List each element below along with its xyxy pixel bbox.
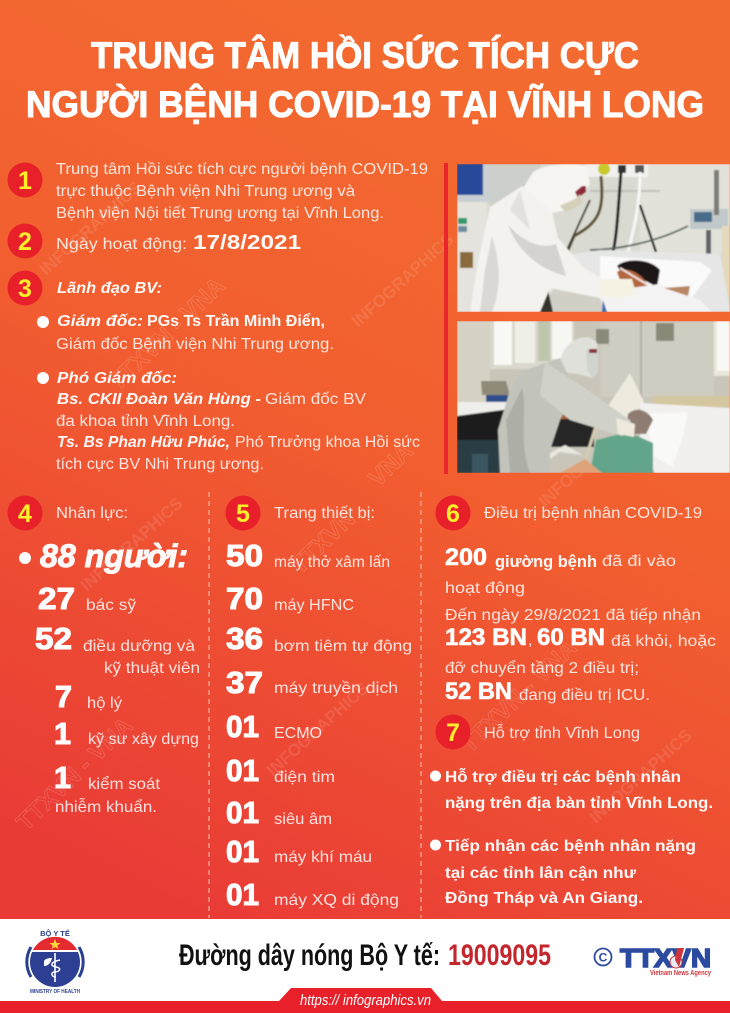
panel: section 2 start date	[8, 224, 301, 258]
panel: section 4 staffing	[8, 496, 200, 816]
panel: section 5 equipment: 70	[226, 581, 263, 616]
panel: section 5 equipment: máy thở xâm lấn	[274, 554, 390, 571]
panel: section 4 staffing: kiểm soát	[88, 775, 161, 793]
panel: section 5 equipment: 37	[226, 665, 263, 700]
text: INFOGRAPHICS	[535, 410, 645, 511]
panel: section 3 hospital leadership: Giám đốc Bệnh viện Nhi Trung ương.	[56, 336, 334, 353]
icon: Ministry of Health logo: BỘ Y TẾ	[40, 928, 70, 938]
panel: section 4 staffing: điều dưỡng và	[83, 638, 195, 655]
photo: doctor in protective suit caring for elderly patient	[457, 321, 730, 473]
panel: section 6 COVID-19 treatment: giường bệnh	[495, 552, 597, 571]
panel: section 4 staffing: nhiễm khuẩn.	[55, 797, 157, 816]
panel: section 2 start date: 17/8/2021	[193, 232, 301, 254]
panel: section 5 equipment: 01	[226, 753, 259, 788]
panel: section 5 equipment: 01	[226, 795, 259, 830]
text: TTXVN	[285, 505, 361, 579]
panel: section 6 COVID-19 treatment: 6	[446, 500, 460, 528]
panel: section 5 equipment: bơm tiêm tự động	[274, 638, 412, 655]
panel: section 5 equipment: 01	[226, 709, 259, 744]
panel: section 4 staffing: 1	[54, 760, 71, 795]
text: INFOGRAPHICS	[348, 230, 458, 331]
panel: section 5 equipment: 01	[226, 834, 259, 869]
panel: section 3 hospital leadership: đa khoa tỉnh Vĩnh Long.	[56, 413, 235, 430]
panel: section 4 staffing: 7	[55, 679, 72, 714]
panel: section 6 COVID-19 treatment: Điều trị bệnh nhân COVID-19	[484, 505, 702, 522]
panel: section 3 hospital leadership: Bs. CKII Đoàn Văn Hùng -	[57, 391, 261, 408]
hotline: 19009095	[448, 939, 551, 972]
panel: section 3 hospital leadership: Giám đốc BV	[265, 391, 366, 408]
panel: section 1 introduction: trực thuộc Bệnh viện Nhi Trung ương và	[56, 183, 355, 200]
footer band	[0, 919, 730, 1001]
website ribbon	[0, 988, 730, 1013]
panel: section 6 COVID-19 treatment: đỡ chuyển tầng 2 điều trị;	[445, 659, 639, 677]
panel: section 6 COVID-19 treatment: hoạt động	[445, 580, 525, 597]
panel: section 3 hospital leadership	[8, 270, 420, 473]
panel: section 6 COVID-19 treatment: đã khỏi, hoặc	[611, 633, 716, 650]
panel: section 5 equipment: máy khí máu	[274, 849, 372, 866]
panel: section 6 COVID-19 treatment: 52 BN	[445, 678, 512, 705]
panel: section 4 staffing: 4	[18, 500, 32, 528]
text: VNA	[363, 438, 419, 492]
panel: section 4 staffing: 1	[54, 716, 71, 751]
text: TTXVN - VNA	[11, 712, 139, 836]
panel: section 5 equipment: điện tim	[274, 769, 335, 786]
title: TRUNG TÂM HỒI SỨC TÍCH CỰC	[91, 34, 639, 76]
panel: section 3 hospital leadership: Phó Giám đốc:	[57, 370, 177, 387]
panel: section 6 COVID-19 treatment	[436, 496, 716, 705]
panel: section 5 equipment: 36	[226, 621, 263, 656]
panel: section 4 staffing: hộ lý	[87, 695, 122, 712]
panel: section 7 support for Vinh Long: nặng trên địa bàn tỉnh Vĩnh Long.	[445, 795, 713, 812]
panel: section 7 support for Vinh Long: Đồng Tháp và An Giang.	[445, 890, 643, 907]
panel: section 5 equipment: Trang thiết bị:	[274, 505, 375, 522]
panel: section 3 hospital leadership: Lãnh đạo BV:	[57, 280, 162, 297]
panel: section 3 hospital leadership: PGs Ts Trần Minh Điển,	[147, 312, 325, 330]
panel: section 5 equipment: 50	[226, 538, 263, 573]
panel: section 4 staffing: 27	[38, 581, 75, 616]
panel: section 1 introduction: Bệnh viện Nội tiết Trung ương tại Vĩnh Long.	[56, 205, 384, 222]
text: TTXVN - VNA	[103, 272, 231, 396]
text: INFOGRAPHICS	[36, 178, 146, 279]
icon: Ministry of Health logo: MINISTRY OF HEALTH	[30, 989, 80, 995]
panel: section 3 hospital leadership: 3	[18, 275, 32, 303]
panel: section 3 hospital leadership: Giám đốc:	[57, 313, 143, 330]
panel: section 2 start date: Ngày hoạt động:	[56, 236, 187, 253]
panel: section 5 equipment: máy truyền dịch	[274, 680, 398, 697]
photo: doctor in protective suit treating ventilated patient	[457, 163, 730, 312]
panel: section 3 hospital leadership: Ts. Bs Phan Hữu Phúc,	[57, 434, 230, 451]
panel: section 5 equipment: 01	[226, 877, 259, 912]
panel: section 6 COVID-19 treatment: ,	[528, 632, 532, 649]
panel: section 3 hospital leadership: Phó Trưởng khoa Hồi sức	[235, 434, 420, 451]
panel: section 7 support for Vinh Long: Hỗ trợ tỉnh Vĩnh Long	[484, 723, 640, 742]
panel: section 5 equipment: máy XQ di động	[274, 892, 399, 909]
panel: section 7 support for Vinh Long: tại các tỉnh lân cận như	[445, 865, 636, 882]
panel: section 4 staffing: kỹ sư xây dựng	[88, 731, 199, 748]
panel: section 5 equipment: 5	[236, 500, 250, 528]
panel: section 4 staffing: Nhân lực:	[56, 505, 128, 522]
panel: section 6 COVID-19 treatment: đang điều trị ICU.	[519, 687, 650, 704]
icon: TTXVN logo: Vietnam News Agency	[650, 970, 711, 977]
panel: section 5 equipment	[226, 496, 412, 912]
panel: section 5 equipment: ECMO	[274, 725, 322, 742]
panel: section 6 COVID-19 treatment: đã đi vào	[602, 553, 676, 570]
panel: section 6 COVID-19 treatment: 123 BN	[445, 624, 527, 651]
title	[26, 34, 704, 125]
text: INFOGRAPHICS	[586, 726, 696, 827]
panel: section 7 support for Vinh Long: Hỗ trợ điều trị các bệnh nhân	[445, 767, 681, 786]
panel: section 5 equipment: siêu âm	[274, 811, 332, 828]
panel: section 5 equipment: máy HFNC	[274, 597, 354, 614]
text: INFOGRAPHICS	[77, 494, 187, 595]
panel: section 1 introduction	[8, 161, 428, 222]
hotline: Đường dây nóng Bộ Y tế:	[179, 939, 440, 972]
panel: section 4 staffing: kỹ thuật viên	[104, 660, 200, 677]
panel: section 2 start date: 2	[18, 228, 32, 256]
panel: section 4 staffing: 88 người:	[40, 538, 188, 574]
panel: section 1 introduction: Trung tâm Hồi sức tích cực người bệnh COVID-19	[56, 161, 428, 178]
panel: section 1 introduction: 1	[18, 167, 32, 195]
icon: TTXVN logo	[594, 943, 711, 977]
panel: section 6 COVID-19 treatment: 200	[445, 544, 487, 571]
text: TTXVN - VNA	[455, 634, 583, 758]
text: INFOGRAPHICS	[263, 679, 373, 780]
panel: section 7 support for Vinh Long	[430, 714, 713, 907]
panel: section 6 COVID-19 treatment: 60 BN	[537, 624, 605, 651]
panel: section 6 COVID-19 treatment: Đến ngày 29/8/2021 đã tiếp nhận	[445, 607, 701, 624]
panel: section 3 hospital leadership: tích cực BV Nhi Trung ương.	[56, 456, 264, 473]
panel: section 7 support for Vinh Long: Tiếp nhận các bệnh nhân nặng	[445, 838, 696, 855]
icon: TTXVN logo: TTXVN	[620, 943, 711, 973]
icon: TTXVN logo: C	[599, 950, 608, 964]
website ribbon: https:// infographics.vn	[300, 992, 431, 1009]
icon: Ministry of Health logo	[27, 928, 83, 995]
panel: section 4 staffing: bác sỹ	[86, 597, 136, 614]
title: NGƯỜI BỆNH COVID-19 TẠI VĨNH LONG	[26, 83, 704, 125]
panel: section 7 support for Vinh Long: 7	[446, 719, 460, 747]
panel: section 4 staffing: 52	[35, 621, 72, 656]
